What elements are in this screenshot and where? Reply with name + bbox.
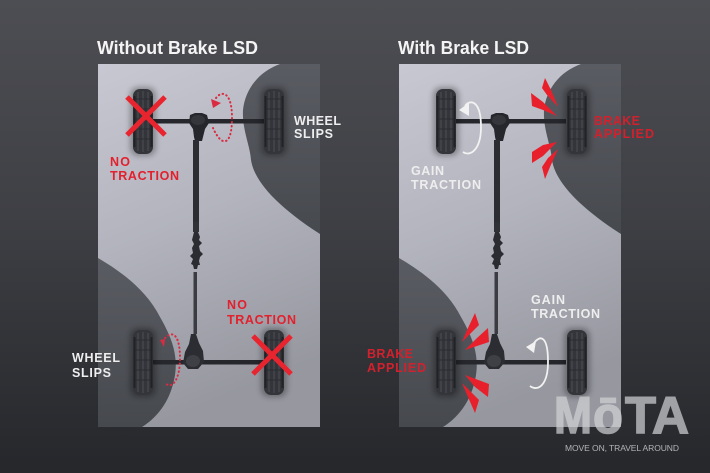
low-grip patch: bottom left (98, 258, 176, 427)
label: gain traction bottom: GAIN (531, 293, 565, 307)
wheel: rear right (564, 328, 590, 397)
label: brake applied bottom: BRAKE (367, 347, 413, 361)
label: brake applied top: BRAKE (594, 114, 640, 128)
label: wheel slips bottom: WHEEL (72, 351, 120, 365)
drivetrain (451, 113, 566, 369)
logo: MOTA watermark: M (554, 387, 592, 445)
low-grip patch: top right (544, 64, 621, 234)
label: no traction bottom: TRACTION (227, 313, 296, 327)
panel: with brake LSD (367, 64, 654, 427)
label: gain traction top (411, 164, 481, 192)
label: wheel slips top: SLIPS (294, 127, 333, 141)
icon: red cross rear right (253, 336, 291, 374)
title: without brake LSD: Without Brake LSD (97, 38, 258, 58)
low-grip patch: bottom left (399, 258, 477, 427)
drivetrain (150, 113, 265, 369)
label: wheel slips bottom (72, 351, 120, 380)
label: no traction top: TRACTION (110, 169, 179, 183)
panel: without brake LSD (72, 64, 341, 427)
label: brake applied top (594, 114, 654, 141)
wheel: front right (261, 87, 287, 156)
label: no traction bottom (227, 298, 296, 327)
label: gain traction top: GAIN (411, 164, 444, 178)
logo tagline: MOVE ON, TRAVEL AROUND (565, 443, 679, 453)
label: no traction bottom: NO (227, 298, 247, 312)
logo: MOTA watermark: A (652, 387, 689, 445)
label: no traction top (110, 155, 179, 183)
icon: brake bolts rear left (462, 313, 489, 413)
label: gain traction bottom: TRACTION (531, 307, 600, 321)
wheel: front left (130, 87, 156, 156)
arrow: front wheel rotation (211, 94, 232, 141)
low-grip patch: top right (243, 64, 320, 234)
label: wheel slips top: WHEEL (294, 114, 341, 128)
logo: MOTA watermark: T (625, 387, 656, 445)
arrow: rear right gain rotation (526, 338, 548, 388)
label: brake applied top: APPLIED (594, 127, 654, 141)
label: wheel slips bottom: SLIPS (72, 366, 111, 380)
label: gain traction bottom (531, 293, 600, 321)
label: brake applied bottom (367, 347, 426, 375)
arrow: front left gain rotation (459, 102, 481, 154)
title: with brake LSD: With Brake LSD (398, 38, 529, 58)
label: wheel slips top (294, 114, 341, 141)
logo: MOTA watermark (554, 387, 689, 445)
wheel: rear left (130, 328, 156, 397)
logo: MOTA watermark: ō (593, 387, 623, 445)
icon: red cross front left (127, 97, 165, 135)
wheel: front left (433, 87, 459, 156)
wheel: rear right (261, 328, 287, 397)
road surface (98, 64, 320, 427)
label: no traction top: NO (110, 155, 130, 169)
wheel: rear left (433, 328, 459, 397)
wheel: front right (564, 87, 590, 156)
label: brake applied bottom: APPLIED (367, 361, 426, 375)
arrow: rear wheel rotation (160, 334, 180, 385)
road surface (399, 64, 621, 427)
label: gain traction top: TRACTION (411, 178, 481, 192)
icon: brake bolts front right (531, 78, 558, 179)
